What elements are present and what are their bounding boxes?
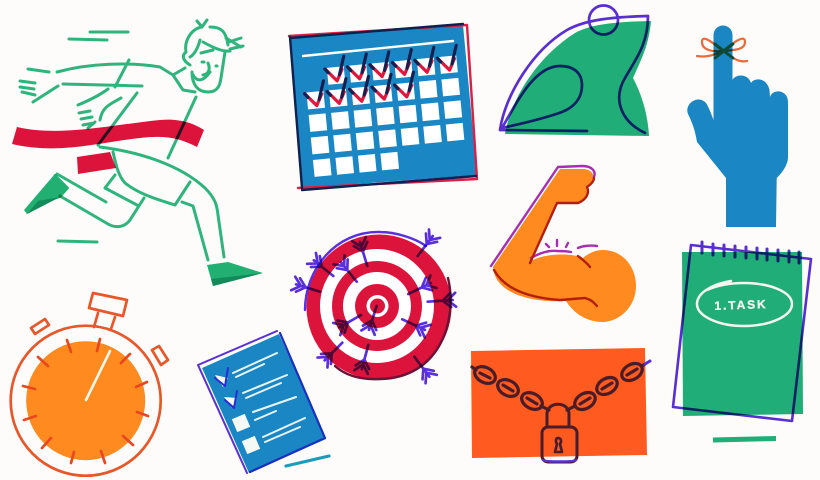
arm shape (493, 169, 636, 322)
arm upper outline (491, 166, 597, 266)
finish ribbon (12, 120, 204, 174)
padlock (542, 404, 577, 462)
task label: 1.TASK (714, 297, 768, 313)
target with arrows (291, 229, 456, 383)
teal pen stroke (286, 456, 329, 466)
string bow (697, 39, 747, 61)
runner crossing finish line (12, 20, 263, 286)
flexed arm (491, 166, 636, 322)
watch hand (86, 351, 110, 400)
frog outline (500, 6, 648, 133)
envelope (471, 348, 647, 458)
shoes (24, 175, 263, 286)
checklist sheet (202, 334, 326, 473)
rim accents (305, 232, 426, 310)
tick marks (23, 339, 148, 463)
notebook page (682, 252, 803, 416)
calendar page (290, 25, 477, 188)
filled boxes (215, 375, 260, 454)
task oval (697, 281, 792, 326)
frog body (505, 21, 651, 136)
pen stroke (713, 438, 776, 440)
chain (472, 360, 645, 413)
arrows (291, 229, 456, 383)
knot (715, 44, 733, 58)
chained envelope with padlock (471, 348, 650, 462)
frog (500, 6, 651, 136)
checklist lines (233, 353, 305, 442)
target rings (306, 234, 452, 380)
calendar (289, 24, 477, 190)
stopwatch (11, 293, 168, 476)
runner outline (20, 20, 243, 260)
checklist (198, 331, 329, 473)
watch buttons (31, 293, 168, 365)
day grid (304, 55, 466, 177)
pointing hand with string (687, 26, 788, 227)
sheet edges (198, 331, 277, 473)
check marks (215, 368, 237, 408)
hand (687, 26, 788, 227)
notebook (673, 242, 811, 440)
arm inner outline (494, 178, 597, 306)
notebook frame and rings (673, 242, 811, 421)
check marks (301, 45, 461, 107)
watch ring (11, 326, 161, 476)
watch face (26, 341, 145, 460)
